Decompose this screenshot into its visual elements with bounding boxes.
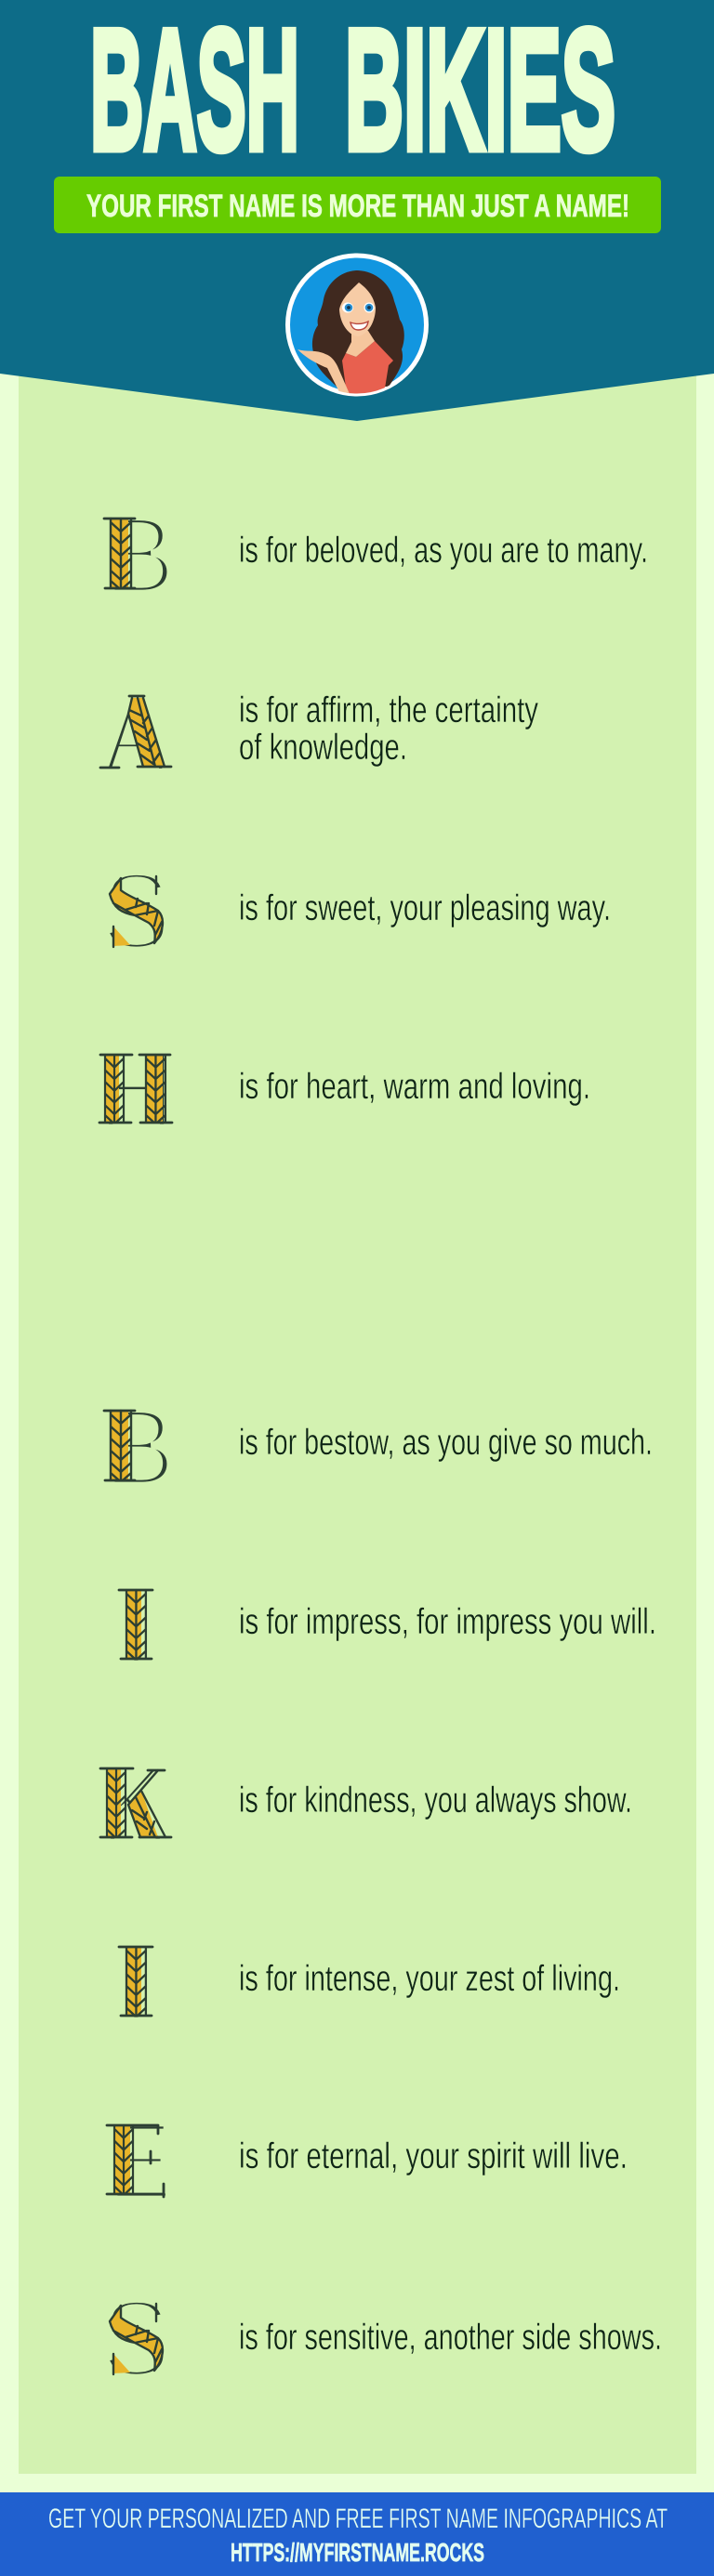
icon: woman avatar (288, 256, 426, 394)
text: H line: is for heart, warm and loving. (239, 1067, 590, 1107)
letter E: E (107, 2099, 172, 2222)
subtitle banner (54, 177, 661, 233)
letter I second: I (121, 1922, 152, 2044)
letter S second: S (101, 2278, 171, 2400)
letter S: S (101, 850, 171, 973)
footer: HTTPS://MYFIRSTNAME.ROCKS (231, 2538, 484, 2567)
letter H: H (97, 1029, 176, 1151)
letter A: A (104, 673, 166, 795)
letter K: K (99, 1743, 167, 1866)
text: A lines (239, 690, 538, 768)
letter B: B (102, 494, 176, 617)
header banner (0, 0, 714, 421)
text: A lines: of knowledge. (239, 728, 407, 768)
letter B second: B (102, 1387, 176, 1509)
letter I: I (121, 1565, 152, 1688)
footer (0, 2492, 714, 2576)
text: A lines: is for affirm, the certainty (239, 690, 538, 730)
